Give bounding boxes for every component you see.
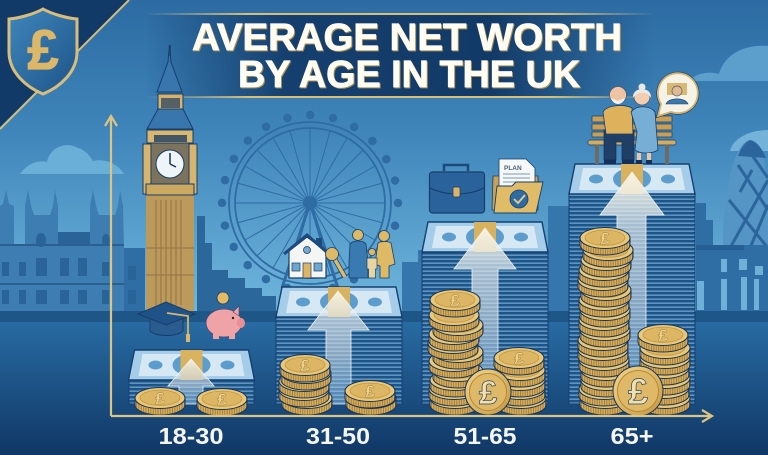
coin stacks [428, 290, 546, 415]
y axis arrow [105, 116, 117, 416]
column: 65+ [569, 73, 698, 449]
icon: briefcase [430, 165, 484, 213]
sky background [0, 0, 768, 312]
cloud: top right [688, 46, 768, 81]
icon: plan folder: PLAN [504, 165, 522, 172]
age label: 18-30 [158, 423, 224, 449]
coin stacks: £ [514, 349, 524, 368]
cash stack [422, 222, 548, 404]
column: 31-50 [276, 230, 402, 449]
city silhouette: behind wheel [197, 216, 276, 312]
corner badge ribbon [0, 0, 129, 129]
icon: pound shield [9, 9, 77, 94]
cash stack [569, 164, 695, 404]
big pound coin [465, 369, 511, 415]
icon: key [326, 248, 345, 277]
icon: house [284, 235, 329, 278]
cloud: left [20, 145, 124, 174]
London Eye wheel [222, 115, 398, 291]
coin stacks [135, 388, 247, 416]
coin stacks [578, 228, 690, 415]
cloud: behind gherkin [730, 130, 768, 151]
icon: piggy bank [206, 292, 245, 339]
ground band [0, 311, 768, 323]
x axis arrow [111, 410, 712, 422]
coin stacks: £ [600, 229, 610, 248]
Gherkin tower and right skyline [696, 140, 768, 312]
title text: AVERAGE NET WORTH [192, 17, 622, 59]
cash stack [128, 350, 254, 404]
growth arrow [454, 228, 516, 404]
title text [192, 17, 622, 96]
Houses of Parliament silhouette [0, 190, 145, 312]
cash stack [276, 287, 402, 404]
growth arrow [308, 291, 369, 404]
growth arrow [600, 172, 664, 404]
icon: graduation cap [138, 302, 195, 342]
column: 18-30 [128, 292, 254, 449]
coin stacks: £ [450, 291, 460, 310]
coin stacks: £ [300, 356, 310, 375]
title text: BY AGE IN THE UK [238, 54, 581, 96]
age label: 65+ [610, 423, 654, 449]
age label: 31-50 [306, 423, 370, 449]
coin stacks: £ [217, 390, 227, 409]
speech bubble [658, 73, 698, 116]
growth arrow [168, 359, 214, 404]
big pound coin [613, 366, 663, 416]
coin stacks: £ [365, 382, 375, 401]
title banner [145, 13, 655, 98]
city silhouette: between cash stacks [402, 206, 570, 312]
big pound coin: £ [628, 371, 648, 412]
icon: couple on bench [588, 84, 676, 164]
icon: pound shield: £ [27, 18, 59, 81]
age label: 51-65 [454, 423, 516, 449]
ground floor [0, 322, 768, 455]
coin stacks: £ [155, 389, 165, 408]
icon: plan folder [492, 159, 543, 213]
coin stacks: £ [658, 326, 668, 345]
coin stacks [279, 354, 396, 415]
big pound coin: £ [479, 374, 498, 411]
icon: family [349, 230, 395, 278]
Big Ben tower [143, 45, 197, 311]
column: 51-65 [422, 159, 548, 449]
